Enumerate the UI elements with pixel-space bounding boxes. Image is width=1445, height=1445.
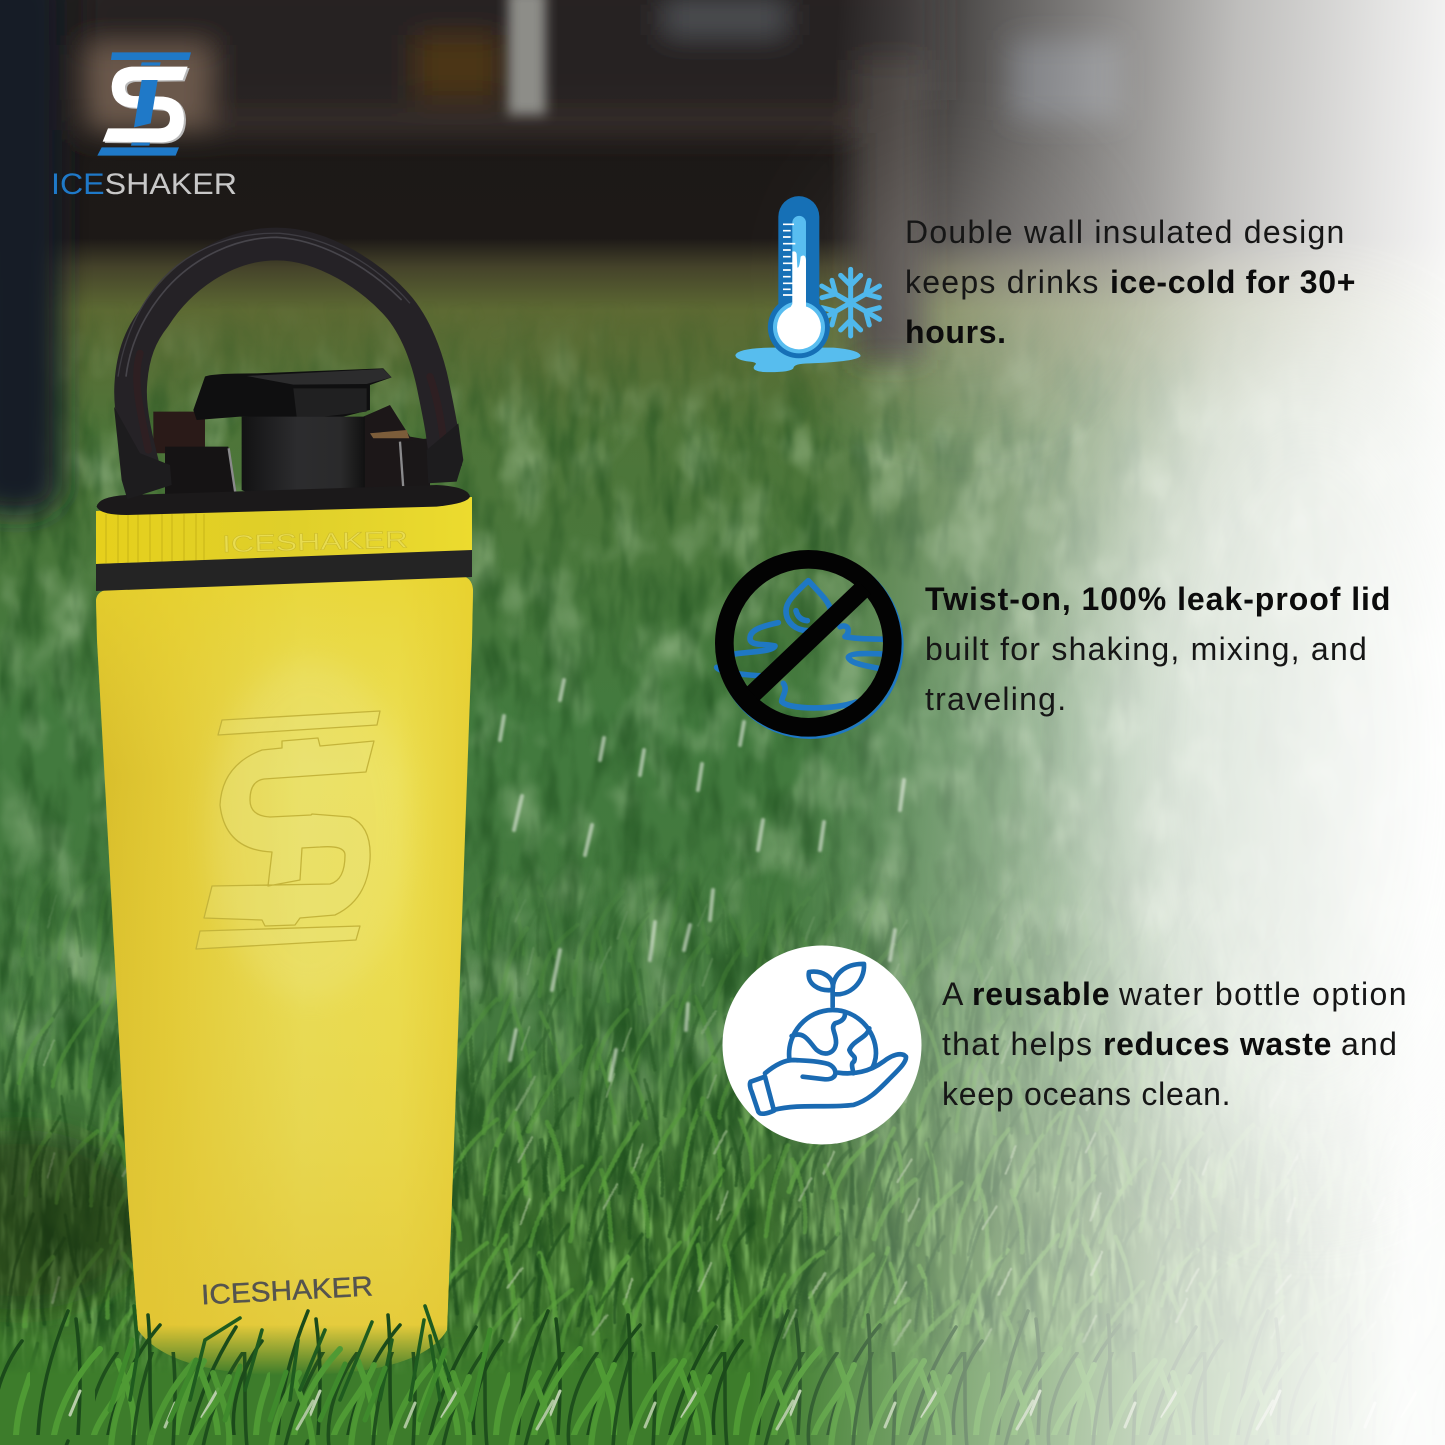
flip cap <box>193 368 392 420</box>
bottle bottom wordmark: ICESHAKER <box>200 1270 374 1310</box>
text: insulation: ice-cold for 30+ <box>1110 264 1356 300</box>
collar embossed text: ICESHAKER <box>222 526 408 558</box>
lid back blocks <box>153 412 205 453</box>
text: reusable: keep oceans clean. <box>942 1076 1231 1112</box>
handle feet <box>114 407 172 499</box>
bottle embossed logo <box>196 711 380 949</box>
text: leak-proof: Twist-on, 100% leak-proof lid <box>925 581 1391 617</box>
lid base <box>97 485 470 515</box>
logo wordmark: ICESHAKER <box>51 168 237 201</box>
text: reusable: that helps <box>942 1026 1093 1062</box>
bottle <box>96 233 473 1375</box>
icon: melting thermometer <box>735 196 885 372</box>
lid details and handle <box>97 233 470 515</box>
icon: hand holding earth <box>722 946 922 1144</box>
background: blurred interior <box>0 0 1120 515</box>
spout <box>242 417 365 495</box>
handle <box>131 244 446 480</box>
feature 1: insulation <box>735 196 1356 372</box>
background: bright grass specks <box>500 680 904 1080</box>
logo: Iceshaker <box>51 52 237 201</box>
text: reusable: A <box>942 976 965 1012</box>
text: reusable: reusable <box>972 976 1110 1012</box>
text: reusable: water bottle option <box>1118 976 1408 1012</box>
text: leak-proof: traveling. <box>925 681 1067 717</box>
background: grass texture <box>0 330 1292 1368</box>
text: leak-proof: built for shaking, mixing, and <box>925 631 1368 667</box>
text: reusable: and <box>1341 1026 1398 1062</box>
icon: no leak <box>717 553 902 738</box>
text: insulation: Double wall insulated design <box>905 214 1346 250</box>
bottle body <box>96 575 473 1375</box>
feature 2: leak-proof <box>717 553 1391 738</box>
text: insulation: keeps drinks <box>905 264 1100 300</box>
foreground grass <box>0 1305 1445 1445</box>
text: insulation: hours. <box>905 314 1007 350</box>
bottle collar <box>96 497 472 564</box>
bottle black seal ring <box>96 550 472 591</box>
text: reusable: reduces waste <box>1103 1026 1332 1062</box>
lid front blocks <box>165 447 237 498</box>
feature 3: reusable <box>722 946 1408 1144</box>
